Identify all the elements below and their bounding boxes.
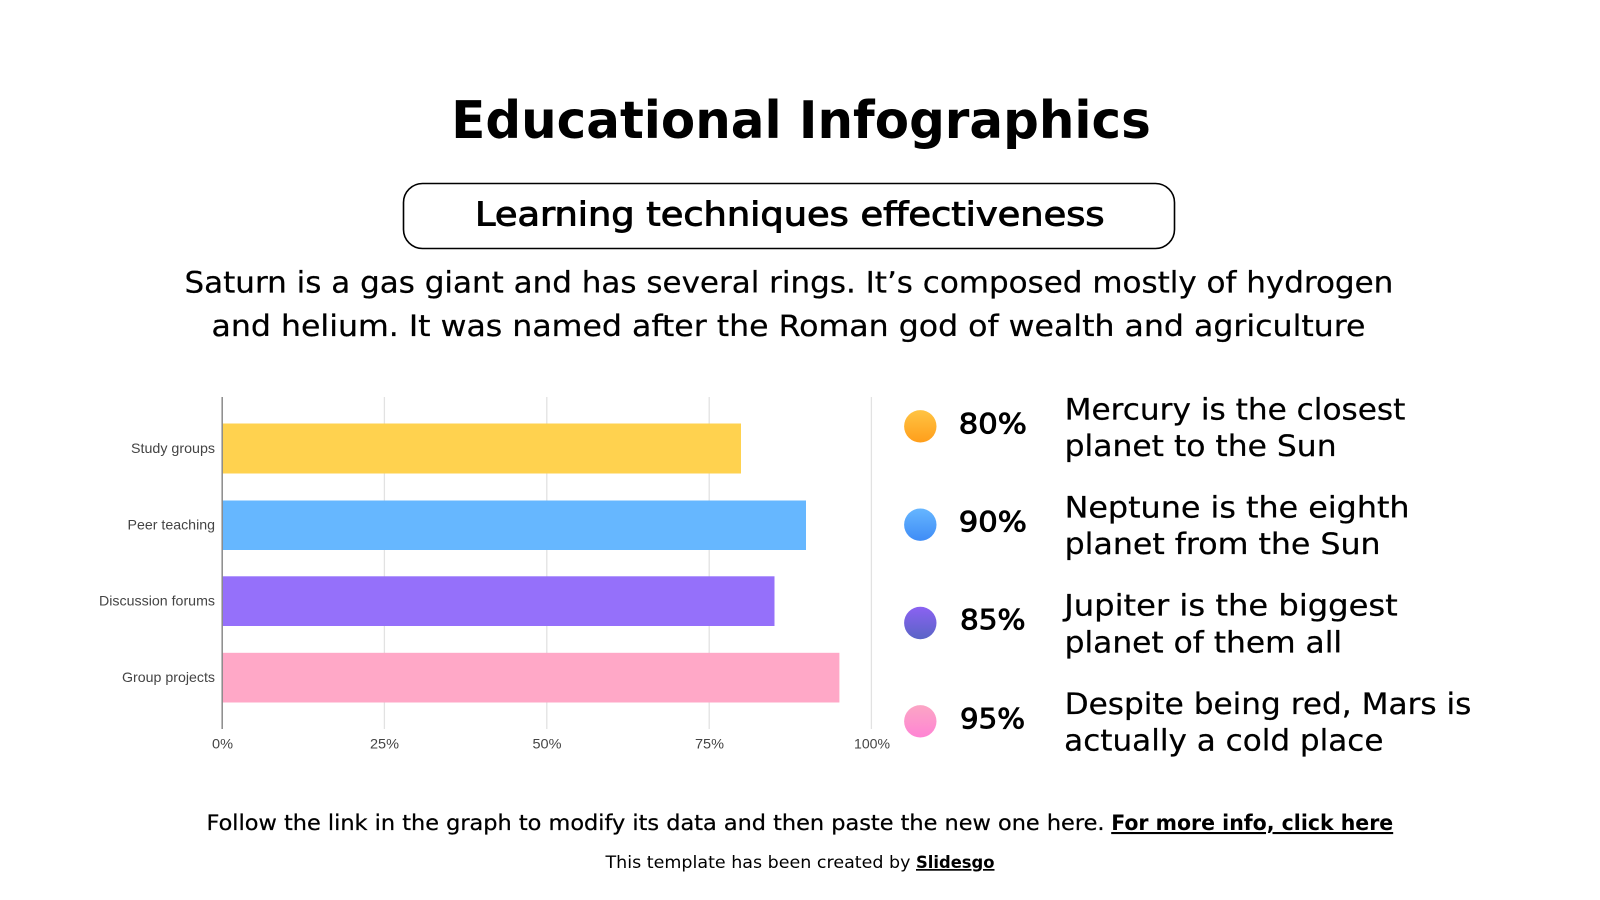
category labels: Discussion forums xyxy=(99,593,215,609)
legend item: 80% Mercury xyxy=(904,392,1405,463)
Mars description xyxy=(1064,687,1471,758)
footer instruction: For more info, click here xyxy=(1111,811,1393,835)
axis value labels xyxy=(212,735,890,751)
template credit: This template has been created by xyxy=(604,853,910,873)
description text xyxy=(184,266,1393,343)
axis value labels: 75% xyxy=(695,735,724,751)
template credit: Slidesgo xyxy=(916,853,994,873)
axis value labels: 0% xyxy=(212,735,233,751)
footer instruction: Follow the link in the graph to modify its data and then paste the new one here. xyxy=(206,811,1104,835)
category labels xyxy=(99,440,215,685)
description text: and helium. It was named after the Roman god of wealth and agriculture xyxy=(212,309,1366,343)
vertical axis xyxy=(221,397,223,729)
value 90%: 90% xyxy=(959,505,1027,538)
Jupiter description: Jupiter is the biggest xyxy=(1062,589,1398,623)
icon: orange circle xyxy=(904,410,936,442)
bar chart xyxy=(99,397,890,751)
subtitle text: Learning techniques effectiveness xyxy=(475,196,1104,234)
bar: peer teaching xyxy=(222,500,806,550)
icon: purple circle xyxy=(904,607,936,639)
Jupiter description: planet of them all xyxy=(1065,625,1342,659)
bar: group projects xyxy=(222,653,839,702)
category labels: Peer teaching xyxy=(128,516,215,532)
title: Educational Infographics xyxy=(451,91,1151,151)
icon: blue circle xyxy=(904,508,936,541)
Mars description: Despite being red, Mars is xyxy=(1065,687,1471,721)
Neptune description xyxy=(1065,490,1410,561)
value 95%: 95% xyxy=(960,702,1025,735)
Mercury description: planet to the Sun xyxy=(1065,429,1337,463)
Mercury description xyxy=(1065,392,1405,463)
axis value labels: 100% xyxy=(854,735,890,751)
legend item: 85% Jupiter xyxy=(904,589,1398,659)
legend item: 95% Mars xyxy=(904,687,1471,758)
pill outline xyxy=(404,184,1174,248)
Mars description: actually a cold place xyxy=(1064,724,1383,758)
axis value labels: 25% xyxy=(370,735,399,751)
gridlines xyxy=(384,397,871,729)
value 85%: 85% xyxy=(960,603,1026,636)
category labels: Study groups xyxy=(131,440,215,456)
category labels: Group projects xyxy=(122,669,215,685)
description text: Saturn is a gas giant and has several rings. It’s composed mostly of hydrogen xyxy=(184,266,1393,300)
subtitle pill xyxy=(404,184,1174,248)
icon: pink circle xyxy=(904,705,936,738)
bar: discussion forums xyxy=(222,576,774,626)
Neptune description: planet from the Sun xyxy=(1065,527,1381,561)
Jupiter description xyxy=(1062,589,1398,659)
Neptune description: Neptune is the eighth xyxy=(1065,490,1410,524)
axis value labels: 50% xyxy=(532,735,562,751)
bar: study groups xyxy=(222,424,741,474)
Mercury description: Mercury is the closest xyxy=(1065,392,1405,426)
legend item: 90% Neptune xyxy=(904,490,1410,561)
value 80%: 80% xyxy=(959,407,1027,440)
legend xyxy=(904,392,1471,758)
